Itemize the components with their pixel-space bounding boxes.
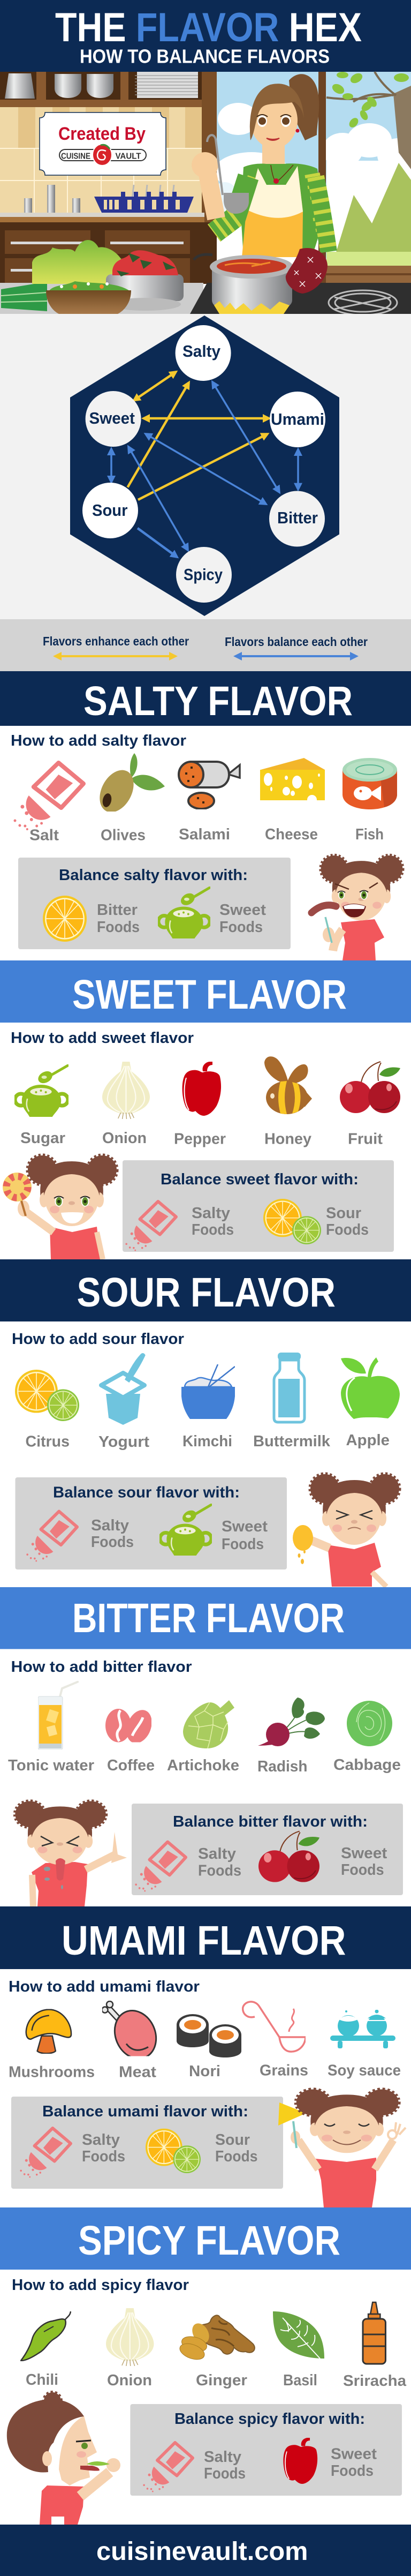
icon: fruit cherries: [340, 1062, 400, 1113]
sour how-to heading: How to add sour flavor: [12, 1331, 184, 1348]
label: grains: Grains: [260, 2062, 308, 2079]
bitter how-to heading: How to add bitter flavor: [11, 1658, 192, 1676]
label: sour foods: [215, 2131, 258, 2165]
node: sour: Sour: [92, 501, 127, 520]
label: sweet foods: Sweet: [219, 902, 266, 919]
icon: cheese: [260, 758, 325, 805]
label: salty foods: [91, 1517, 134, 1551]
label: tonic water: Tonic water: [8, 1757, 94, 1774]
label: buttermilk: Buttermilk: [253, 1433, 331, 1450]
label: meat: Meat: [119, 2063, 156, 2081]
label: sweet foods: Foods: [341, 1861, 384, 1879]
icon: ginger: [178, 2315, 255, 2362]
icon: shaker: [125, 1201, 176, 1251]
label: citrus: Citrus: [26, 1433, 70, 1451]
icon: grains ladle: [243, 2002, 306, 2052]
label: mushrooms: Mushrooms: [9, 2063, 95, 2081]
label: soy sauce: Soy sauce: [328, 2062, 401, 2079]
node: salty: Salty: [182, 342, 221, 361]
sour banner: SOUR FLAVOR: [77, 1270, 336, 1316]
node: spicy: [176, 547, 232, 603]
panel: balance umami: [11, 2097, 283, 2189]
blue balance arrows: [111, 382, 298, 557]
subtitle: HOW TO BALANCE FLAVORS: [80, 45, 330, 67]
yellow enhance arrows: [127, 372, 269, 500]
icon: citrus: [263, 1199, 321, 1244]
label: salt: Salt: [29, 827, 59, 844]
window with view: [211, 71, 411, 284]
label: radish: Radish: [257, 1758, 307, 1775]
cooking pot: [194, 254, 293, 314]
label: sweet foods: [222, 1518, 268, 1553]
icon: artichoke: [183, 1700, 234, 1748]
label: sweet foods: Sweet: [331, 2446, 377, 2463]
sour banner: [0, 1259, 411, 1321]
balance heading: Balance bitter flavor with:: [173, 1813, 368, 1830]
icon: coffee: [105, 1706, 156, 1747]
label: salty foods: Salty: [192, 1205, 230, 1222]
spicy banner: [0, 2207, 411, 2270]
label: olives: Olives: [101, 827, 146, 844]
icon: sriracha: [363, 2302, 385, 2364]
panel: balance sour: [15, 1477, 287, 1569]
cuisine vault logo: [59, 144, 146, 166]
icon: pepper: [182, 1062, 221, 1116]
panel: balance sweet: [123, 1160, 394, 1252]
shirt: [241, 163, 325, 257]
footer url: cuisinevault.com: [96, 2537, 308, 2566]
girl eating sausage: [311, 855, 402, 960]
section: sweet flavor: [0, 960, 411, 1259]
icon: olives: [93, 753, 165, 818]
icon: chili: [21, 2311, 71, 2361]
label: sweet foods: Sweet: [222, 1518, 268, 1535]
icon: nori: [177, 2014, 241, 2057]
label: coffee: Coffee: [107, 1757, 155, 1774]
umami banner: UMAMI FLAVOR: [62, 1918, 346, 1964]
icon: salami: [179, 762, 240, 809]
label: kimchi: Kimchi: [182, 1433, 232, 1450]
ladle: [207, 135, 223, 195]
label: nori: Nori: [189, 2063, 220, 2080]
label: pepper: Pepper: [174, 1130, 226, 1147]
label: salty foods: Salty: [82, 2131, 120, 2149]
label: sweet foods: [219, 902, 266, 936]
icon: shaker: [135, 1842, 186, 1892]
cuisine vault logo: CUISINE: [61, 152, 90, 161]
sink and bottles: [24, 185, 80, 213]
girl enjoying cheese: [278, 2089, 406, 2207]
label: honey: Honey: [264, 1130, 311, 1147]
footer: [0, 2525, 411, 2576]
label: sweet foods: Foods: [219, 919, 263, 936]
panel: balance spicy: [130, 2404, 402, 2496]
label: salty foods: Foods: [192, 1221, 234, 1238]
section: spicy flavor: [0, 2207, 411, 2525]
label: sour foods: Sour: [326, 1205, 361, 1222]
label: bitter foods: Foods: [97, 919, 140, 936]
sweet banner: [0, 960, 411, 1023]
icon: soy sauce: [330, 2010, 395, 2048]
created by text: Created By: [58, 124, 146, 144]
stove burner: [329, 290, 397, 315]
icon: yogurt: [101, 1354, 144, 1425]
label: chili: Chili: [26, 2371, 58, 2389]
bitter banner: BITTER FLAVOR: [72, 1595, 345, 1641]
node: umami: [270, 392, 325, 447]
salty banner: SALTY FLAVOR: [83, 678, 353, 724]
label: salty foods: Foods: [82, 2148, 125, 2165]
label: onion: Onion: [107, 2372, 152, 2389]
label: sweet foods: Foods: [331, 2462, 374, 2480]
label: bitter foods: Bitter: [97, 902, 138, 919]
icon: sugar bowl: [158, 888, 210, 938]
label: basil: Basil: [283, 2372, 317, 2389]
balance heading: Balance sour flavor with:: [53, 1484, 240, 1501]
node: bitter: [269, 491, 325, 546]
label: apple: Apple: [346, 1432, 390, 1449]
cuisine vault logo: VAULT: [116, 152, 141, 161]
label: sriracha: Sriracha: [343, 2372, 407, 2390]
label: sweet foods: [331, 2446, 377, 2480]
upper cabinets with dishes: [0, 72, 217, 107]
label: cheese: Cheese: [265, 826, 318, 843]
section: bitter flavor: [0, 1587, 411, 1906]
icon: honey bee: [264, 1056, 312, 1114]
label: sour foods: [326, 1205, 369, 1238]
label: salty foods: Salty: [198, 1845, 236, 1862]
node: bitter: Bitter: [277, 508, 318, 527]
icon: citrus: [15, 1370, 79, 1421]
dish rack: [94, 185, 194, 213]
icon: radish: [258, 1698, 325, 1746]
icon: sugar: [15, 1065, 68, 1117]
label: onion: Onion: [102, 1130, 147, 1147]
label: salty foods: Salty: [91, 1517, 129, 1534]
icon: meat: [102, 2001, 164, 2066]
head: [250, 93, 298, 148]
icon: tonic water: [38, 1681, 79, 1749]
salty how-to heading: How to add salty flavor: [11, 732, 186, 749]
label: salty foods: [198, 1845, 241, 1880]
label: salty foods: [204, 2449, 246, 2482]
salty banner: [0, 671, 411, 726]
label: sweet foods: Foods: [222, 1536, 264, 1553]
icon: fish can: [342, 758, 397, 809]
label: salty foods: Foods: [198, 1862, 241, 1880]
label: artichoke: Artichoke: [167, 1757, 239, 1774]
node: sweet: Sweet: [89, 409, 135, 427]
left arm and hand: [214, 177, 248, 233]
label: salty foods: [82, 2131, 125, 2165]
icon: shaker: [20, 2128, 71, 2178]
label: yogurt: Yogurt: [98, 1433, 149, 1451]
lettuce and salad bowl: [1, 240, 184, 314]
counter and lower cabinets: [0, 213, 411, 314]
icon: onion: [106, 2308, 154, 2366]
legend: enhance: Flavors enhance each other: [43, 634, 189, 648]
tiled wall: [0, 72, 217, 222]
balance heading: Balance sweet flavor with:: [161, 1171, 359, 1188]
icon: mushroom: [26, 2010, 71, 2053]
icon: kimchi bowl: [181, 1364, 235, 1419]
label: salty foods: [192, 1205, 234, 1238]
girl eating chili: [7, 2392, 120, 2525]
label: ginger: Ginger: [196, 2372, 247, 2389]
label: salty foods: Foods: [91, 1534, 134, 1551]
icon: basil: [273, 2311, 324, 2359]
balance heading: Balance umami flavor with:: [42, 2103, 248, 2120]
label: fish: Fish: [355, 826, 384, 843]
sweet banner: SWEET FLAVOR: [72, 972, 347, 1018]
label: salami: Salami: [179, 826, 230, 843]
umami banner: [0, 1906, 411, 1969]
title: the flavor hex: THE FLAVOR HEX: [55, 5, 362, 50]
label: sour foods: Foods: [215, 2148, 258, 2165]
label: sugar: Sugar: [20, 1130, 65, 1147]
node: salty: [176, 325, 231, 381]
section: sour flavor: [0, 1259, 411, 1587]
label: sour foods: Foods: [326, 1221, 369, 1238]
girl with lollipop: [3, 1155, 117, 1259]
girl squeezing lemon: [293, 1474, 399, 1587]
icon: shaker: [143, 2443, 193, 2492]
icon: onion: [102, 1062, 150, 1119]
label: sweet foods: Sweet: [341, 1845, 387, 1862]
label: salty foods: Foods: [204, 2465, 246, 2482]
created by sign: [40, 112, 166, 175]
icon: salt: [13, 763, 83, 830]
panel: balance salty: [18, 858, 291, 949]
legend: balance: Flavors balance each other: [225, 635, 368, 649]
label: salty foods: Salty: [204, 2449, 241, 2466]
navy hexagon: [70, 316, 339, 616]
icon: apple: [341, 1357, 400, 1419]
bitter banner: [0, 1587, 411, 1649]
icon: sugar bowl: [160, 1505, 211, 1556]
woman: [192, 74, 331, 257]
node: umami: Umami: [271, 410, 324, 429]
title banner: [0, 0, 411, 72]
legend: [0, 619, 411, 671]
balance heading: Balance spicy flavor with:: [174, 2410, 365, 2428]
section: salty flavor: [0, 671, 411, 960]
node: sweet: [86, 391, 141, 447]
oven mitt: [286, 248, 328, 294]
label: fruit: Fruit: [348, 1130, 383, 1147]
label: cabbage: Cabbage: [333, 1756, 401, 1774]
right sleeve: [316, 177, 329, 252]
panel: balance bitter: [132, 1804, 403, 1895]
section: umami flavor: [0, 1906, 411, 2207]
illustration: woman cooking in a kitchen: [0, 71, 411, 315]
apron: [242, 166, 303, 257]
spicy banner: SPICY FLAVOR: [78, 2218, 340, 2264]
umami how-to heading: How to add umami flavor: [9, 1978, 200, 1995]
icon: shaker: [26, 1511, 77, 1562]
node: spicy: Spicy: [184, 565, 223, 584]
label: bitter foods: [97, 902, 140, 936]
balance heading: Balance salty flavor with:: [59, 867, 248, 884]
necklace: [271, 165, 293, 182]
icon: cabbage: [347, 1701, 392, 1746]
icon: lemon: [43, 896, 87, 942]
spicy how-to heading: How to add spicy flavor: [12, 2277, 189, 2294]
node: sour: [82, 483, 138, 538]
ponytail and hair back: [289, 74, 319, 140]
sweet how-to heading: How to add sweet flavor: [11, 1030, 194, 1047]
icon: citrus: [146, 2129, 201, 2173]
icon: buttermilk: [274, 1353, 305, 1422]
label: sweet foods: [341, 1845, 387, 1879]
icon: cherries: [258, 1831, 319, 1882]
label: sour foods: Sour: [215, 2131, 250, 2149]
girl with tongue out: [15, 1801, 127, 1906]
icon: pepper: [283, 2438, 317, 2484]
panel: flavor hex diagram: [0, 314, 411, 619]
